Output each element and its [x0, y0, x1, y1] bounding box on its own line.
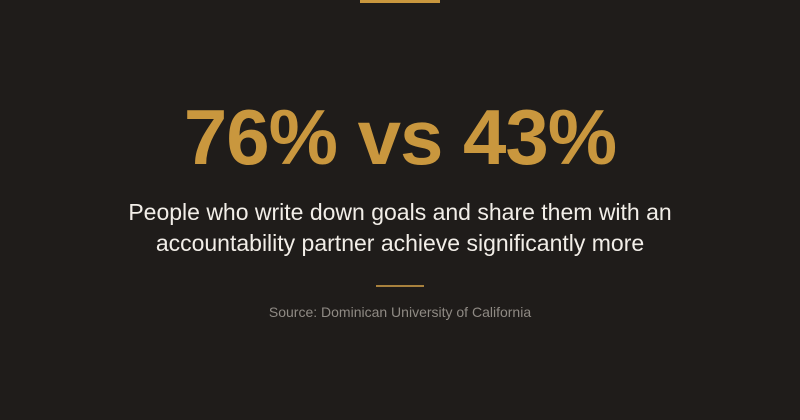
source: Source: Dominican University of California [269, 304, 531, 320]
description text: accountability partner achieve significantly more [156, 230, 644, 256]
description text: People who write down goals and share them with an [128, 199, 672, 225]
top accent bar [360, 0, 440, 3]
headline statistic: 76% vs 43% [184, 93, 616, 181]
divider line [376, 285, 424, 287]
description text [128, 199, 672, 256]
